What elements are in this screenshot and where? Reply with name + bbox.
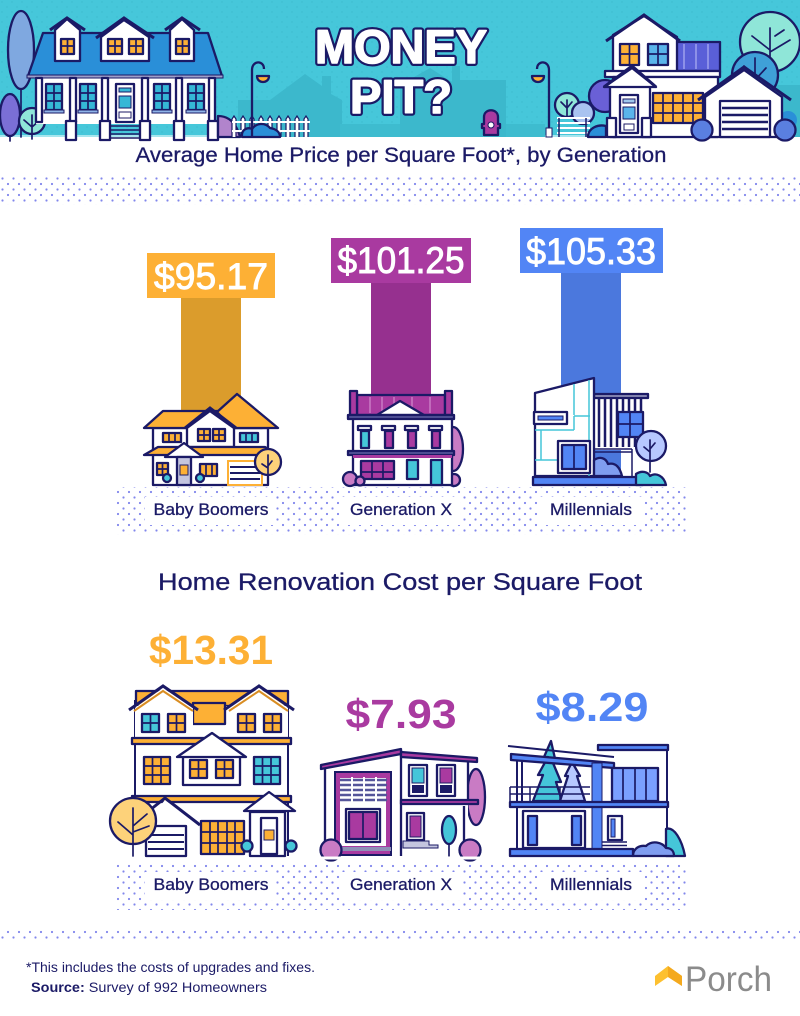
bar: millennials price: $105.33	[526, 231, 656, 272]
labels: renovation generations: Millennials	[550, 875, 632, 894]
title: PIT?	[350, 70, 452, 123]
bar: baby boomers price: $95.17	[154, 256, 268, 297]
icon: millennials large house	[508, 741, 685, 856]
value: generation x renovation: $7.93	[346, 691, 456, 737]
labels: price generations	[154, 500, 632, 519]
dotted label band: price	[115, 487, 687, 535]
labels: renovation generations	[154, 875, 632, 894]
icon: right street lamp and bench	[532, 62, 621, 137]
title: MONEY	[315, 20, 487, 73]
header banner	[0, 0, 800, 137]
labels: renovation generations: Generation X	[350, 875, 452, 894]
labels: price generations: Baby Boomers	[154, 500, 268, 519]
icon: left header house with trees	[0, 11, 223, 141]
icon: millennials small house	[533, 378, 666, 485]
value: millennials renovation: $8.29	[536, 684, 648, 730]
dotted band	[0, 177, 800, 205]
title	[315, 20, 487, 123]
bar: generation x price	[331, 238, 471, 395]
labels: renovation generations: Baby Boomers	[154, 875, 268, 894]
dotted label band: renovation	[115, 862, 687, 910]
dotted footer band	[0, 929, 800, 940]
footnote: Source: Survey of 992 Homeowners	[31, 980, 267, 995]
footnote	[26, 960, 315, 995]
icon: fire hydrant	[482, 110, 500, 135]
icon: street lamp, fence and bushes left	[218, 62, 310, 137]
labels: price generations: Millennials	[550, 500, 632, 519]
labels: price generations: Generation X	[350, 500, 452, 519]
icon: generation x small house	[343, 391, 463, 486]
heading: renovation cost: Home Renovation Cost per Square Foot	[158, 569, 642, 596]
heading: home price: Average Home Price per Square Foot*, by Generation	[136, 143, 666, 167]
bar: millennials price	[520, 228, 663, 485]
value: baby boomers renovation: $13.31	[149, 627, 273, 673]
footnote: *This includes the costs of upgrades and fixes.	[26, 960, 315, 975]
icon: baby boomers large house	[110, 686, 296, 856]
logo: Porch: Porch	[685, 960, 772, 999]
icon: generation x large house	[318, 749, 485, 860]
icon: right header house with trees	[604, 12, 800, 140]
title: MONEY	[315, 20, 487, 73]
bar: generation x price: $101.25	[338, 240, 464, 281]
title: PIT?	[350, 70, 452, 123]
icon: baby boomers small house	[144, 394, 281, 485]
bar: baby boomers price	[147, 253, 275, 415]
